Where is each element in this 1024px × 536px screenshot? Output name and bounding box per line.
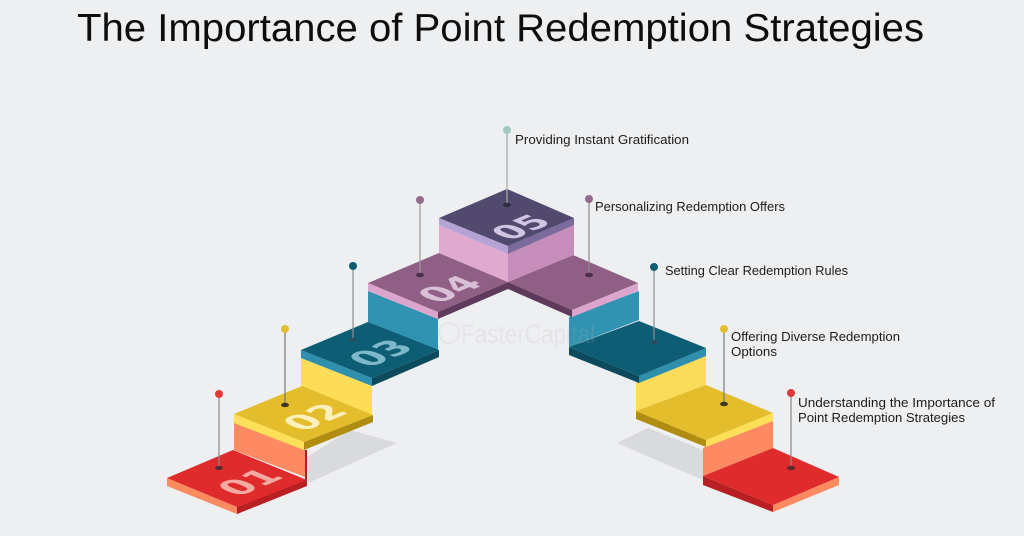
step 03 right (569, 321, 706, 411)
pin 02 left (281, 325, 289, 407)
label: providing instant gratification: Providing Instant Gratification (515, 132, 689, 147)
label: personalizing redemption offers: Personalizing Redemption Offers (595, 199, 785, 214)
number 03: 03 (338, 335, 425, 371)
step 01 right (703, 448, 839, 512)
pin 02 right (720, 325, 728, 406)
pin 03 left (349, 262, 357, 342)
label: offering diverse redemption options: Offering Diverse Redemption (731, 329, 900, 344)
left shadow (307, 430, 397, 483)
label: understanding the importance: Understanding the Importance of (798, 395, 995, 410)
right shadow (617, 428, 703, 480)
label: understanding the importance: Point Redemption Strategies (798, 410, 966, 425)
watermark: FasterCapital (461, 319, 595, 349)
label: offering diverse redemption options: Options (731, 344, 778, 359)
pin 03 right (650, 263, 658, 344)
title: The Importance of Point Redemption Strategies (77, 7, 924, 50)
number 04: 04 (407, 271, 494, 307)
step 01 left (167, 422, 307, 514)
label: offering diverse redemption options (731, 329, 900, 359)
pin 05 (503, 126, 511, 207)
step 02 right (636, 385, 773, 476)
pin 01 left (215, 390, 223, 470)
step 03 left (301, 291, 439, 386)
pin 04 left (416, 196, 424, 277)
number 01: 01 (207, 464, 294, 500)
pin 04 right (585, 195, 593, 277)
label: setting clear redemption rules: Setting Clear Redemption Rules (665, 263, 848, 278)
step 04 right (508, 255, 639, 347)
label: understanding the importance (798, 395, 995, 425)
step 02 left (234, 358, 373, 450)
pin 01 right (787, 389, 795, 470)
step 05 top (439, 189, 574, 282)
step 04 left (368, 253, 508, 319)
number 02: 02 (272, 399, 359, 435)
number 05: 05 (481, 210, 562, 245)
